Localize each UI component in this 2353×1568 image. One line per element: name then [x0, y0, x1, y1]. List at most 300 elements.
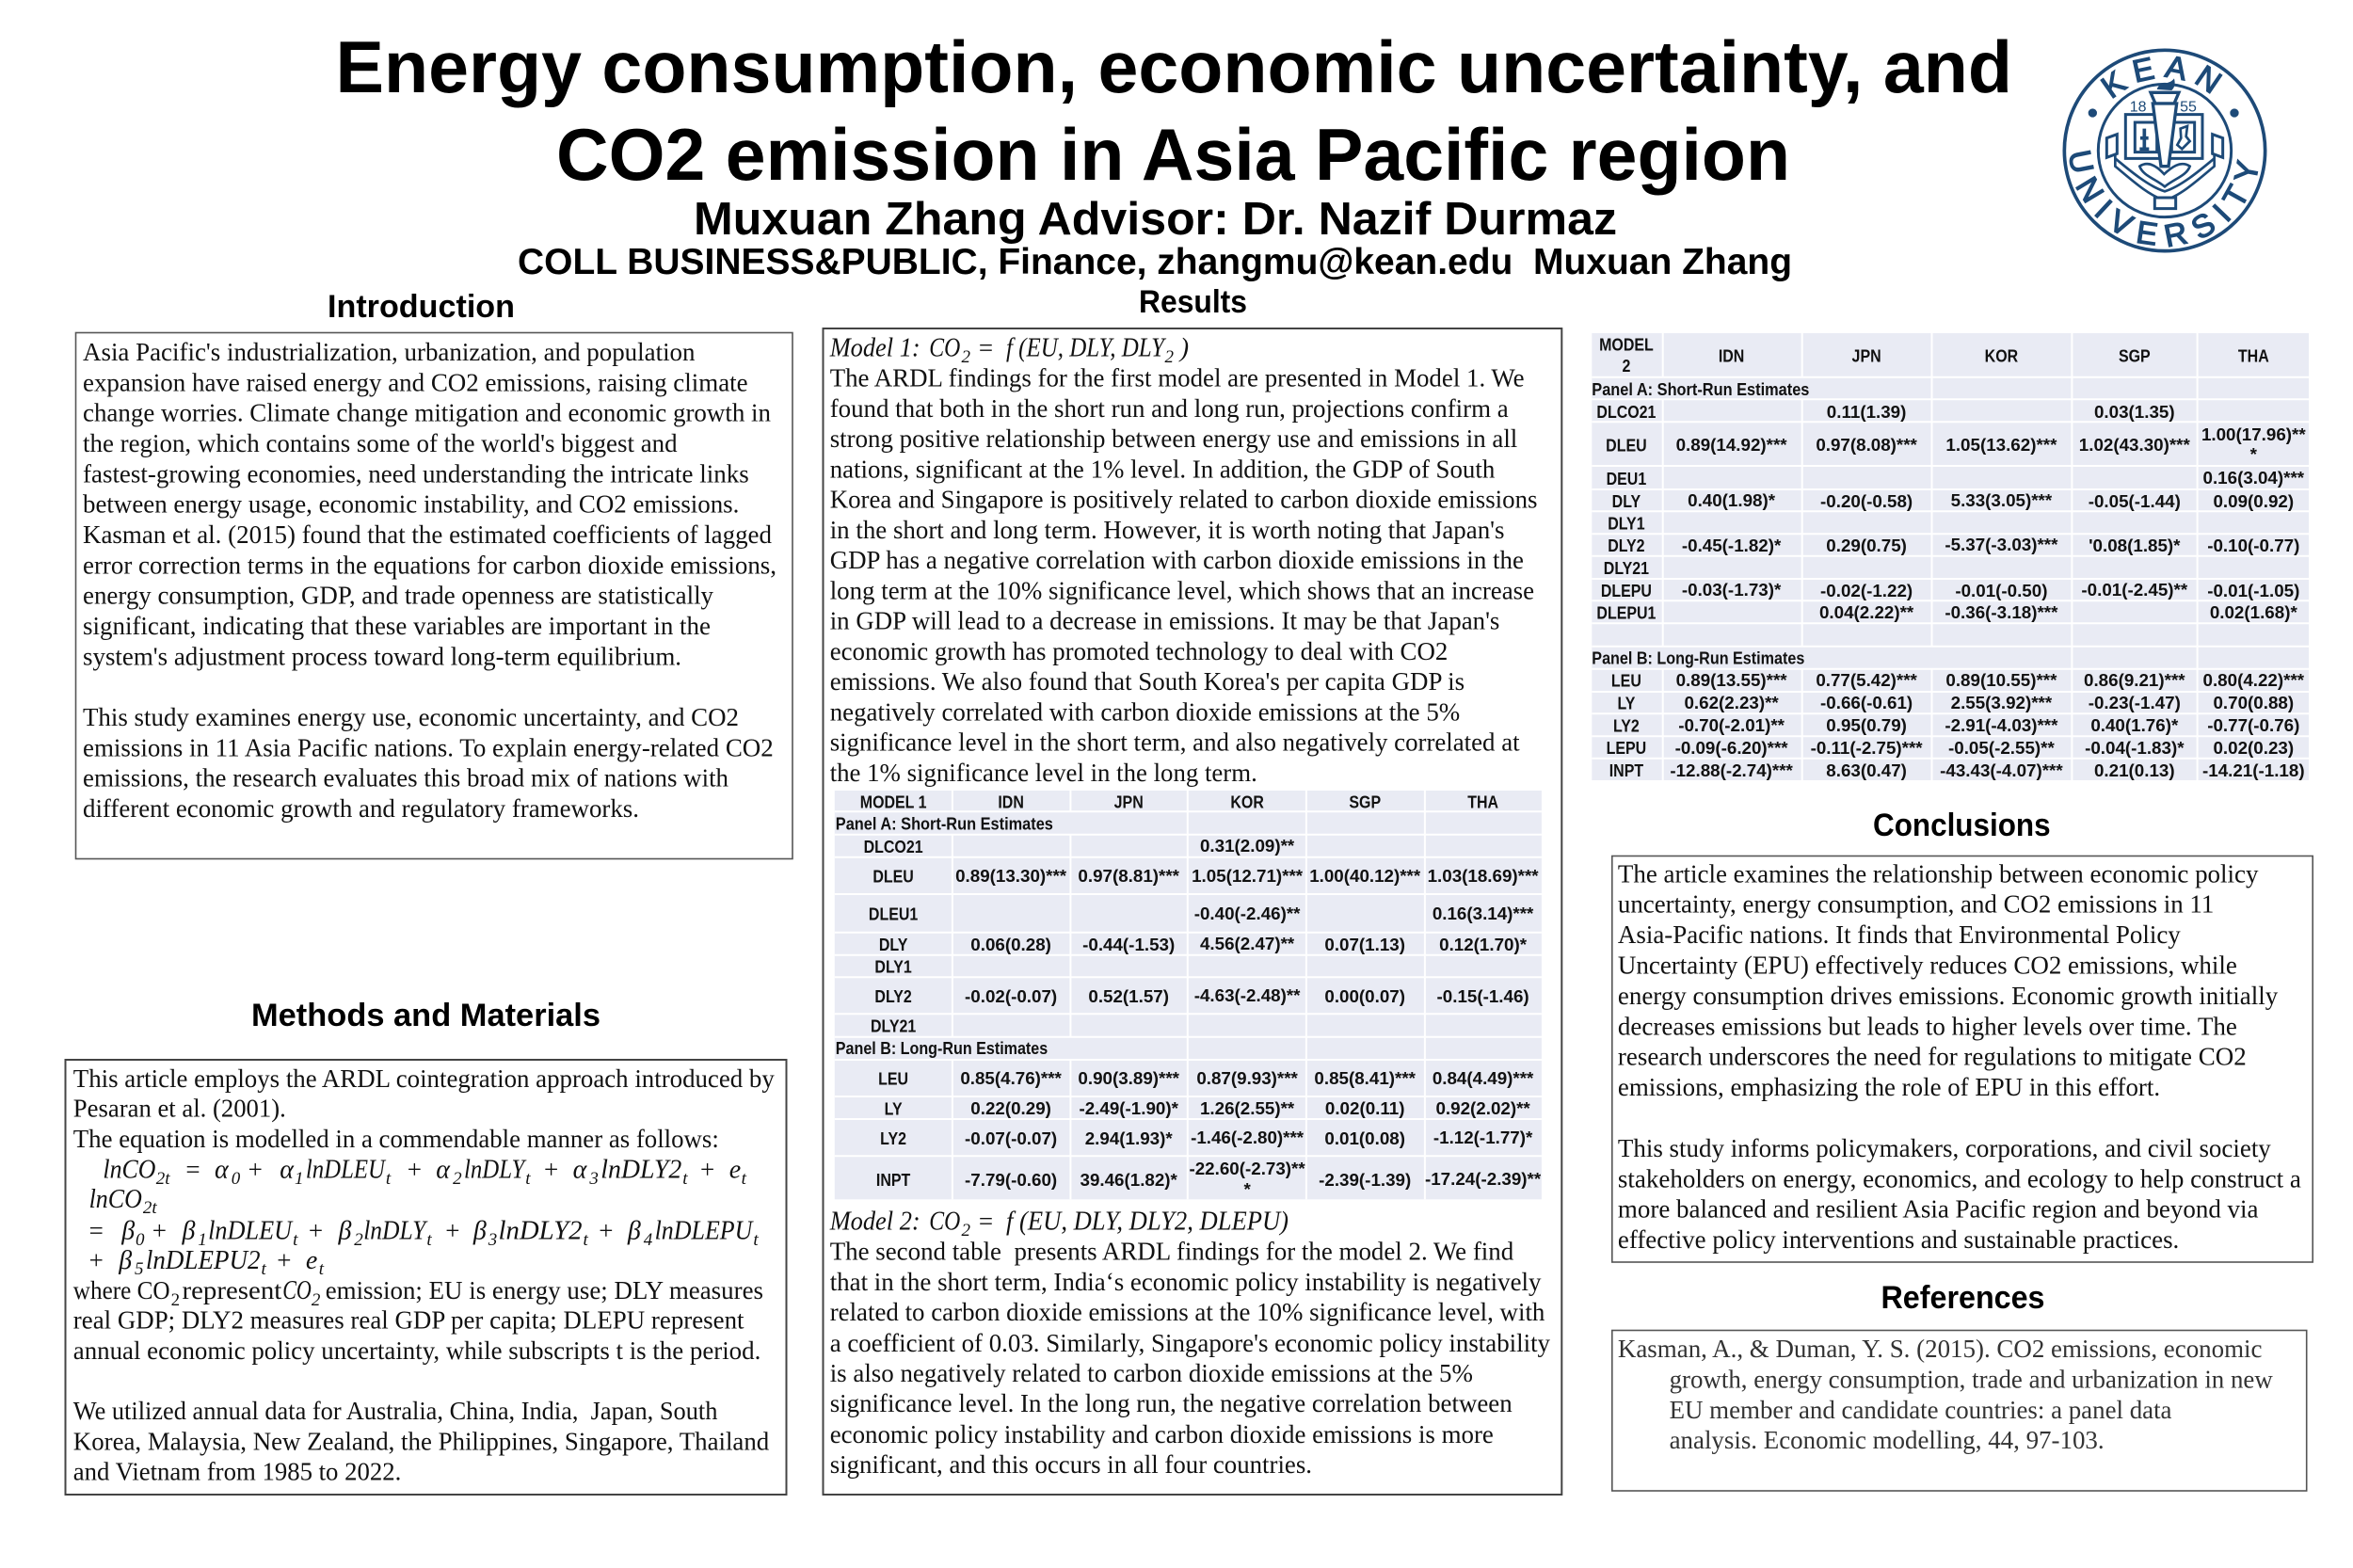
equation: model 1 specification: 3 [588, 1169, 599, 1189]
text block: model 2 findings: that in the short term, India‘s economic policy instability is negatively [830, 1268, 1542, 1296]
equation: model 1 function [829, 333, 1189, 367]
table: model 1 estimates: DLCO21 [864, 837, 923, 856]
table: model 1 estimates: Panel B: Long-Run Estimates [836, 1038, 1048, 1058]
table: model 2 estimates: LEU [1611, 670, 1641, 691]
text block: model 1 findings: GDP has a negative correlation with carbon dioxide emissions in the [830, 546, 1524, 574]
table: model 2 estimates: -0.09(-6.20)*** [1675, 738, 1788, 758]
table: model 2 estimates: DLEPU1 [1596, 602, 1657, 623]
text block: introduction body: different economic growth and regulatory frameworks. [83, 794, 639, 823]
table: model 1 estimates: JPN [1114, 792, 1144, 812]
text block: introduction body: Kasman et al. (2015) found that the estimated coefficients of lagged [83, 520, 772, 549]
table: model 2 estimates: INPT [1609, 760, 1643, 780]
equation: model 1 specification: t [525, 1169, 531, 1189]
equation: model 2 specification: lnDLEPU2 [146, 1246, 260, 1275]
table: model 2 estimates [1592, 333, 2309, 780]
text block: model 2 findings: is also negatively related to carbon dioxide emissions at the 5% [830, 1359, 1473, 1387]
heading: Introduction: Introduction [328, 289, 515, 325]
equation: model 2 specification: t [753, 1230, 759, 1250]
table: model 1 estimates: -1.46(-2.80)*** [1191, 1128, 1305, 1147]
equation: model 1 function: 2 [1165, 347, 1175, 367]
text block: reference entry: analysis. Economic modelling, 44, 97-103. [1670, 1426, 2105, 1454]
text block: method introduction [73, 1064, 775, 1153]
equation: model 2 specification: t [426, 1230, 432, 1250]
equation: model 2 specification: e [306, 1246, 317, 1275]
table: model 2 estimates: 0.29(0.75) [1826, 536, 1907, 555]
table: model 2 estimates: 1.00(17.96)** [2201, 424, 2306, 444]
text block: conclusions body: decreases emissions but leads to higher levels over time. The [1618, 1012, 2237, 1040]
table: model 2 estimates: -0.10(-0.77) [2207, 536, 2299, 555]
equation: model 1 specification: 1 [295, 1169, 303, 1189]
table: model 1 estimates: Panel A: Short-Run Estimates [836, 814, 1053, 834]
text block: conclusions body: energy consumption drives emissions. Economic growth initially [1618, 982, 2279, 1010]
equation: model 2 function: = [979, 1208, 993, 1236]
equation: model 1 specification: t [386, 1169, 392, 1189]
equation: model 1 specification: lnDLY [464, 1156, 527, 1185]
table: model 1 estimates: 1.05(12.71)*** [1192, 866, 1304, 886]
table: model 2 estimates: -0.20(-0.58) [1820, 491, 1913, 511]
table: model 2 estimates: DLEU [1606, 435, 1647, 456]
equation: model 1 specification: 2 [453, 1169, 462, 1189]
equation: model 2 specification: 1 [198, 1230, 207, 1250]
equation: model 1 function: f (EU, DLY, DLY [1006, 333, 1167, 362]
table: model 2 estimates: 2.55(3.92)*** [1951, 693, 2053, 712]
table: model 2 estimates: -0.01(-0.50) [1955, 581, 2047, 600]
text block: conclusions body: effective policy interventions and sustainable practices. [1618, 1225, 2179, 1254]
equation: model 2 specification: lnDLEU [208, 1217, 294, 1246]
equation: model 1 specification [103, 1156, 747, 1189]
text block: introduction body: the region, which contains some of the world's biggest and [83, 429, 678, 457]
text block: introduction body: energy consumption, GDP, and trade openness are statistically [83, 582, 713, 610]
table: model 2 estimates: -0.66(-0.61) [1820, 693, 1913, 712]
equation: model 2 function: CO [929, 1208, 960, 1237]
icon: Kean University seal: 55 [2180, 99, 2197, 115]
equation: model 1 specification: + [544, 1156, 558, 1184]
equation: model 1 specification: = [185, 1156, 200, 1184]
equation: model 1 function: 2 [962, 347, 971, 367]
text block: introduction body: significant, indicating that these variables are important in the [83, 612, 711, 640]
equation: model 2 function: 2 [962, 1221, 971, 1240]
text block: method introduction: This article employs the ARDL cointegration approach introduced by [73, 1064, 775, 1093]
table: model 2 estimates: SGP [2119, 345, 2151, 366]
text block: variable definitions: annual economic policy uncertainty, while subscripts t is the period. [73, 1336, 760, 1365]
equation: model 2 specification: β [337, 1217, 352, 1246]
text block: reference entry [1618, 1335, 2273, 1454]
table: model 1 estimates: -4.63(-2.48)** [1194, 985, 1301, 1005]
table: model 1 estimates: 0.06(0.28) [970, 935, 1051, 954]
table: model 2 estimates: 2 [1622, 356, 1630, 376]
equation: model 2 specification: lnDLY2 [499, 1217, 582, 1246]
table: model 2 estimates: 0.86(9.21)*** [2084, 670, 2185, 690]
table: model 1 estimates: 1.26(2.55)** [1200, 1098, 1295, 1118]
equation: model 2 specification: t [262, 1259, 267, 1279]
equation: model 1 function: CO [929, 333, 960, 362]
table: model 2 estimates: 0.40(1.98)* [1688, 490, 1776, 510]
panel: methods and materials [66, 1060, 787, 1495]
table: model 1 estimates: 0.97(8.81)*** [1078, 866, 1180, 886]
text block: conclusions body: uncertainty, energy consumption, and CO2 emissions in 11 [1618, 890, 2214, 919]
table: model 1 estimates: DLY [879, 935, 908, 954]
table: model 1 estimates: 0.92(2.02)** [1435, 1098, 1530, 1118]
text block: model 2 findings: related to carbon dioxide emissions at the 10% significance level, with [830, 1298, 1545, 1326]
text block: model 1 findings: the 1% significance level in the long term. [830, 759, 1257, 787]
table: model 2 estimates: IDN [1719, 345, 1744, 366]
text block: model 1 findings: nations, significant at the 1% level. In addition, the GDP of South [830, 455, 1496, 483]
table: model 1 estimates: -0.07(-0.07) [965, 1128, 1057, 1148]
table: model 1 estimates: DLY2 [874, 986, 912, 1006]
text block: introduction body: between energy usage, economic instability, and CO2 emissions. [83, 490, 739, 519]
table: model 1 estimates: -0.15(-1.46) [1437, 986, 1529, 1006]
table: model 2 estimates: 0.11(1.39) [1827, 402, 1906, 422]
text block: model 1 findings: emissions. We also found that South Korea's per capita GDP is [830, 667, 1465, 696]
equation: model 2 specification: 5 [135, 1259, 143, 1279]
table: model 1 estimates: 0.31(2.09)** [1200, 836, 1295, 856]
equation: model 1 specification: lnCO [103, 1156, 155, 1185]
text block: conclusions body: Uncertainty (EPU) effectively reduces CO2 emissions, while [1618, 951, 2237, 979]
text block: introduction body [83, 338, 776, 823]
text block: introduction body: This study examines energy use, economic uncertainty, and CO2 [83, 703, 739, 731]
affiliation line: COLL BUSINESS&PUBLIC, Finance, zhangmu@kean.edu Muxuan Zhang [518, 242, 1792, 282]
equation: model 1 specification: α [573, 1156, 588, 1185]
table: model 1 estimates: -7.79(-0.60) [965, 1170, 1057, 1190]
text block: method introduction: The equation is modelled in a commendable manner as follows: [73, 1125, 719, 1153]
table: model 2 estimates: 0.16(3.04)*** [2203, 468, 2305, 488]
table: model 2 estimates: DLY2 [1608, 536, 1645, 555]
table: model 2 estimates: -0.03(-1.73)* [1682, 580, 1782, 600]
table: model 2 estimates: -12.88(-2.74)*** [1670, 760, 1794, 780]
equation: model 1 specification: α [436, 1156, 451, 1185]
equation: model 2 specification: t [584, 1230, 589, 1250]
table: model 1 estimates: -2.39(-1.39) [1319, 1170, 1411, 1190]
heading: References: References [1881, 1280, 2044, 1316]
text block: introduction body: change worries. Climate change mitigation and economic growth in [83, 399, 771, 427]
equation: model 2 specification: t [319, 1259, 325, 1279]
text block: introduction body: system's adjustment process toward long-term equilibrium. [83, 642, 681, 670]
table: model 1 estimates: 0.02(0.11) [1325, 1098, 1404, 1118]
text block: conclusions body: This study informs policymakers, corporations, and civil society [1618, 1134, 2271, 1162]
text block: model 1 findings: Korea and Singapore is positively related to carbon dioxide emissions [830, 486, 1538, 514]
table: model 2 estimates: * [2250, 444, 2258, 464]
text block: conclusions body: more balanced and resilient Asia Pacific region and beyond via [1618, 1195, 2259, 1224]
equation: model 2 specification: 4 [644, 1230, 653, 1250]
equation: model 1 specification: t [682, 1169, 688, 1189]
equation: model 1 function: = [979, 333, 993, 361]
equation: model 2 specification: 3 [488, 1230, 497, 1250]
text block: model 1 findings: negatively correlated with carbon dioxide emissions at the 5% [830, 697, 1460, 726]
table: model 2 estimates: 0.62(2.23)** [1684, 693, 1779, 712]
text block: model 2 findings [830, 1237, 1550, 1479]
panel: conclusions [1612, 856, 2313, 1262]
table: model 2 estimates: MODEL [1599, 334, 1654, 355]
table: model 1 estimates: -22.60(-2.73)** [1189, 1159, 1305, 1178]
table: model 2 estimates: -0.01(-2.45)** [2081, 580, 2188, 600]
table: model 2 estimates: THA [2238, 345, 2269, 366]
title: CO2 emission in Asia Pacific region [556, 113, 1790, 196]
text block: model 2 findings: The second table presents ARDL findings for the model 2. We find [830, 1237, 1514, 1265]
text block: model 2 findings: significant, and this occurs in all four countries. [830, 1450, 1312, 1479]
table: model 2 estimates: -0.05(-1.44) [2089, 491, 2181, 511]
text block: conclusions body: emissions, emphasizing the role of EPU in this effort. [1618, 1073, 2160, 1101]
panel: introduction [75, 333, 792, 858]
table: model 2 estimates: DLY21 [1604, 558, 1649, 578]
text block: variable definitions: emission; EU is energy use; DLY measures [326, 1276, 763, 1304]
title [335, 25, 2012, 196]
text block: variable definitions: where CO [73, 1276, 170, 1304]
text block: data description: and Vietnam from 1985 to 2022. [73, 1458, 401, 1486]
table: model 2 estimates: -2.91(-4.03)*** [1945, 715, 2058, 735]
table: model 1 estimates: DLY1 [874, 956, 912, 977]
table: model 1 estimates: 39.46(1.82)* [1080, 1170, 1178, 1190]
equation: model 2 specification: β [120, 1217, 135, 1246]
table: model 1 estimates: * [1243, 1179, 1251, 1199]
equation: model 2 specification: + [309, 1217, 323, 1245]
heading: Conclusions: Conclusions [1873, 808, 2051, 843]
table: model 2 estimates: JPN [1852, 345, 1881, 366]
table: model 1 estimates: DLEU1 [869, 904, 919, 924]
table: model 2 estimates: 0.04(2.22)** [1819, 602, 1914, 622]
text block: variable definitions: real GDP; DLY2 measures real GDP per capita; DLEPU represent [73, 1306, 744, 1335]
table: model 2 estimates: 8.63(0.47) [1826, 760, 1907, 780]
text block: model 2 findings: a coefficient of 0.03. Similarly, Singapore's economic policy instability [830, 1329, 1550, 1357]
icon: Kean University seal: 18 [2130, 99, 2147, 115]
table: model 2 estimates: LY [1617, 693, 1636, 713]
equation: model 1 specification: lnDLY2 [600, 1156, 681, 1185]
table: model 2 estimates: -0.01(-1.05) [2207, 581, 2299, 600]
text block: method introduction: Pesaran et al. (2001). [73, 1095, 286, 1123]
table: model 1 estimates: 4.56(2.47)** [1200, 934, 1295, 953]
text block: introduction body: expansion have raised energy and CO2 emissions, raising climate [83, 368, 748, 396]
text block: variable definitions: represent [183, 1276, 282, 1304]
equation: model 1 specification: α [215, 1156, 230, 1185]
table: model 1 estimates: LEU [878, 1068, 908, 1089]
text block: introduction body: emissions in 11 Asia Pacific nations. To explain energy-related CO2 [83, 733, 774, 761]
icon: Kean University seal: UNIVERSITY [2069, 151, 2259, 248]
text block: variable definitions: CO [282, 1276, 312, 1305]
table: model 1 estimates: 1.00(40.12)*** [1309, 866, 1421, 886]
table: model 2 estimates: 5.33(3.05)*** [1951, 490, 2053, 510]
table: model 1 estimates: 0.12(1.70)* [1439, 935, 1528, 954]
text block: data description [73, 1397, 770, 1486]
table: model 1 estimates: INPT [876, 1170, 911, 1190]
table: model 2 estimates: 0.70(0.88) [2213, 693, 2294, 712]
table: model 2 estimates: 0.02(1.68)* [2210, 602, 2297, 622]
heading: Results: Results [1139, 284, 1247, 320]
equation: model 2 specification: = [89, 1217, 104, 1245]
table: model 1 estimates: 0.85(8.41)*** [1314, 1068, 1417, 1088]
table: model 2 estimates: -0.11(-2.75)*** [1811, 738, 1923, 758]
authors and advisor: Muxuan Zhang Advisor: Dr. Nazif Durmaz [694, 194, 1617, 245]
table: model 1 estimates: -1.12(-1.77)* [1433, 1128, 1533, 1147]
text block: variable definitions [73, 1276, 763, 1365]
table: model 2 estimates: 0.02(0.23) [2213, 738, 2294, 758]
text block: conclusions body [1618, 859, 2301, 1254]
text block: model 1 findings: significance level in the short term, and also negatively correlated at [830, 728, 1520, 757]
text block: model 1 findings: long term at the 10% significance level, which shows that an increase [830, 576, 1534, 604]
text block: reference entry: EU member and candidate countries: a panel data [1670, 1396, 2172, 1424]
equation: model 2 specification: β [627, 1217, 641, 1246]
table: model 1 estimates: -2.49(-1.90)* [1079, 1098, 1179, 1118]
equation: model 2 specification: + [445, 1217, 459, 1245]
panel: results [823, 328, 1561, 1495]
table: model 2 estimates: 0.09(0.92) [2213, 491, 2294, 511]
text block: model 1 findings: economic growth has promoted technology to deal with CO2 [830, 637, 1448, 665]
text block: variable definitions: 2 [171, 1290, 180, 1310]
equation: model 2 specification [89, 1185, 759, 1279]
table: model 1 estimates: 0.00(0.07) [1324, 986, 1405, 1006]
table: model 2 estimates: 0.21(0.13) [2094, 760, 2175, 780]
text block: data description: Korea, Malaysia, New Zealand, the Philippines, Singapore, Thailand [73, 1428, 770, 1456]
table: model 1 estimates: 0.84(4.49)*** [1433, 1068, 1534, 1088]
text block: introduction body: emissions, the research evaluates this broad mix of nations with [83, 764, 728, 792]
table: model 1 estimates: -0.40(-2.46)** [1194, 904, 1301, 923]
text block: model 1 findings: The ARDL findings for the first model are presented in Model 1. We [830, 364, 1525, 392]
equation: model 2 specification: + [89, 1246, 104, 1274]
table: model 1 estimates: IDN [998, 792, 1024, 812]
equation: model 2 specification: 2t [143, 1198, 157, 1218]
equation: model 2 specification: β [472, 1217, 487, 1246]
equation: model 1 specification: + [700, 1156, 714, 1184]
table: model 2 estimates: DLEPU [1601, 581, 1652, 600]
text block: model 1 findings: found that both in the short run and long run, projections confirm a [830, 394, 1509, 423]
table: model 2 estimates: 0.80(4.22)*** [2203, 670, 2305, 690]
equation: model 2 specification: + [277, 1246, 292, 1274]
table: model 2 estimates: LY2 [1613, 715, 1640, 736]
table: model 2 estimates: KOR [1985, 345, 2019, 366]
equation: model 1 specification: e [729, 1156, 741, 1185]
heading: Methods and Materials: Methods and Materials [251, 998, 600, 1033]
table: model 1 estimates: 0.52(1.57) [1088, 986, 1169, 1006]
table: model 2 estimates: -0.05(-2.55)** [1948, 738, 2055, 758]
table: model 1 estimates: 0.22(0.29) [970, 1098, 1051, 1118]
table: model 2 estimates: 0.89(14.92)*** [1676, 435, 1787, 455]
table: model 1 estimates: 0.87(9.93)*** [1196, 1068, 1299, 1088]
table: model 2 estimates: -0.02(-1.22) [1820, 581, 1913, 600]
table: model 2 estimates: -14.21(-1.18) [2202, 760, 2305, 780]
text block: conclusions body: Asia-Pacific nations. It finds that Environmental Policy [1618, 920, 2181, 949]
table: model 2 estimates: -0.45(-1.82)* [1682, 536, 1782, 555]
table: model 2 estimates: -0.36(-3.18)*** [1945, 602, 2058, 622]
text block: introduction body: Asia Pacific's industrialization, urbanization, and population [83, 338, 696, 366]
table: model 2 estimates: DLCO21 [1596, 402, 1657, 422]
table: model 1 estimates: 0.07(1.13) [1324, 935, 1405, 954]
equation: model 1 specification: + [248, 1156, 263, 1184]
text block: model 1 findings: in the short and long term. However, it is worth noting that Japan's [830, 516, 1504, 544]
equation: model 2 specification: 2 [354, 1230, 363, 1250]
text block: conclusions body: stakeholders on energy, economics, and ecology to help construct a [1618, 1164, 2301, 1192]
panel: references [1612, 1331, 2307, 1491]
icon: Kean University seal [2063, 49, 2266, 252]
table: model 2 estimates: 0.97(8.08)*** [1816, 435, 1918, 455]
table: model 1 estimates: MODEL 1 [860, 792, 927, 812]
table: model 2 estimates: -0.23(-1.47) [2089, 693, 2181, 712]
table: model 1 estimates: DLY21 [871, 1016, 917, 1036]
title: Energy consumption, economic uncertainty, and [335, 25, 2012, 108]
equation: model 2 specification: lnDLY [363, 1217, 429, 1246]
table: model 1 estimates: 0.01(0.08) [1324, 1128, 1405, 1148]
equation: model 1 specification: α [280, 1156, 295, 1185]
table: model 1 estimates: 0.85(4.76)*** [960, 1068, 1063, 1088]
text block: reference entry: Kasman, A., & Duman, Y. S. (2015). CO2 emissions, economic [1618, 1335, 2263, 1363]
table: model 1 estimates: -0.44(-1.53) [1082, 935, 1175, 954]
text block: conclusions body: research underscores the need for regulations to mitigate CO2 [1618, 1043, 2247, 1071]
text block: reference entry: growth, energy consumption, trade and urbanization in new [1670, 1365, 2273, 1393]
table: model 2 estimates: Panel A: Short-Run Estimates [1592, 379, 1809, 399]
equation: model 2 specification: β [181, 1217, 196, 1246]
table: model 1 estimates: DLEU [872, 866, 914, 887]
icon: Kean University seal: KEAN [2100, 56, 2223, 99]
table: model 2 estimates: 0.89(10.55)*** [1945, 670, 2057, 690]
table: model 2 estimates: 0.03(1.35) [2094, 402, 2175, 422]
table: model 2 estimates: 1.05(13.62)*** [1945, 435, 2057, 455]
equation: model 2 function: f (EU, DLY, DLY2, DLEPU) [1006, 1208, 1289, 1237]
table: model 2 estimates: 0.40(1.76)* [2090, 715, 2179, 735]
table: model 2 estimates: -0.04(-1.83)* [2085, 738, 2185, 758]
text block: conclusions body: The article examines the relationship between economic policy [1618, 859, 2259, 888]
equation: model 1 specification: 2t [156, 1169, 170, 1189]
equation: model 1 function: Model 1: [829, 333, 920, 362]
equation: model 1 specification: 0 [232, 1169, 241, 1189]
text block: model 1 findings [830, 364, 1538, 787]
table: model 1 estimates: LY2 [880, 1128, 906, 1148]
table: model 2 estimates: -43.43(-4.07)*** [1940, 760, 2063, 780]
equation: model 1 specification: t [742, 1169, 747, 1189]
table: model 2 estimates: '0.08(1.85)* [2089, 536, 2181, 555]
text block: introduction body: fastest-growing economies, need understanding the intricate links [83, 459, 749, 488]
text block: introduction body: error correction terms in the equations for carbon dioxide emissions, [83, 551, 776, 579]
text block: model 2 findings: economic policy instability and carbon dioxide emissions is more [830, 1420, 1494, 1448]
equation: model 2 specification: 0 [136, 1230, 145, 1250]
equation: model 1 specification: lnDLEU [306, 1156, 386, 1185]
table: model 2 estimates: -5.37(-3.03)*** [1945, 535, 2058, 554]
equation: model 1 function: ) [1178, 333, 1189, 362]
table: model 1 estimates [835, 791, 1542, 1199]
table: model 2 estimates: DLY1 [1608, 513, 1645, 534]
text block: data description: We utilized annual data for Australia, China, India, Japan, South [73, 1397, 718, 1425]
equation: model 2 function [829, 1208, 1289, 1240]
table: model 1 estimates: SGP [1349, 792, 1381, 812]
table: model 1 estimates: 0.89(13.30)*** [955, 866, 1067, 886]
table: model 2 estimates: -0.70(-2.01)** [1678, 715, 1785, 735]
table: model 1 estimates: -17.24(-2.39)** [1425, 1169, 1542, 1189]
equation: model 1 specification: + [408, 1156, 422, 1184]
table: model 1 estimates: 0.90(3.89)*** [1078, 1068, 1180, 1088]
table: model 2 estimates: -0.77(-0.76) [2207, 715, 2299, 735]
text block: model 1 findings: strong positive relationship between energy use and emissions in all [830, 424, 1518, 453]
table: model 2 estimates: Panel B: Long-Run Estimates [1592, 648, 1804, 668]
equation: model 2 specification: + [599, 1217, 614, 1245]
table: model 1 estimates: KOR [1230, 792, 1264, 812]
equation: model 2 specification: lnDLEPU [655, 1217, 754, 1246]
table: model 1 estimates: THA [1467, 792, 1498, 812]
equation: model 2 specification: β [118, 1246, 132, 1275]
table: model 2 estimates: DLY [1612, 491, 1641, 511]
equation: model 2 specification: t [293, 1230, 298, 1250]
table: model 1 estimates: 2.94(1.93)* [1085, 1128, 1173, 1148]
table: model 2 estimates: LEPU [1607, 738, 1646, 758]
table: model 1 estimates: 1.03(18.69)*** [1428, 866, 1539, 886]
table: model 2 estimates: DEU1 [1607, 469, 1647, 488]
text block: model 2 findings: significance level. In the long run, the negative correlation between [830, 1389, 1513, 1417]
table: model 2 estimates: 0.77(5.42)*** [1816, 670, 1918, 690]
table: model 2 estimates: 0.95(0.79) [1826, 715, 1907, 735]
text block: model 1 findings: in GDP will lead to a decrease in emissions. It may be that Japan's [830, 607, 1499, 635]
table: model 2 estimates: 1.02(43.30)*** [2079, 435, 2190, 455]
equation: model 2 specification: + [152, 1217, 167, 1245]
table: model 2 estimates: 0.89(13.55)*** [1676, 670, 1787, 690]
text block: variable definitions: 2 [312, 1290, 321, 1310]
table: model 1 estimates: LY [885, 1098, 903, 1119]
equation: model 2 specification: lnCO [89, 1185, 142, 1214]
table: model 1 estimates: 0.16(3.14)*** [1433, 904, 1534, 923]
